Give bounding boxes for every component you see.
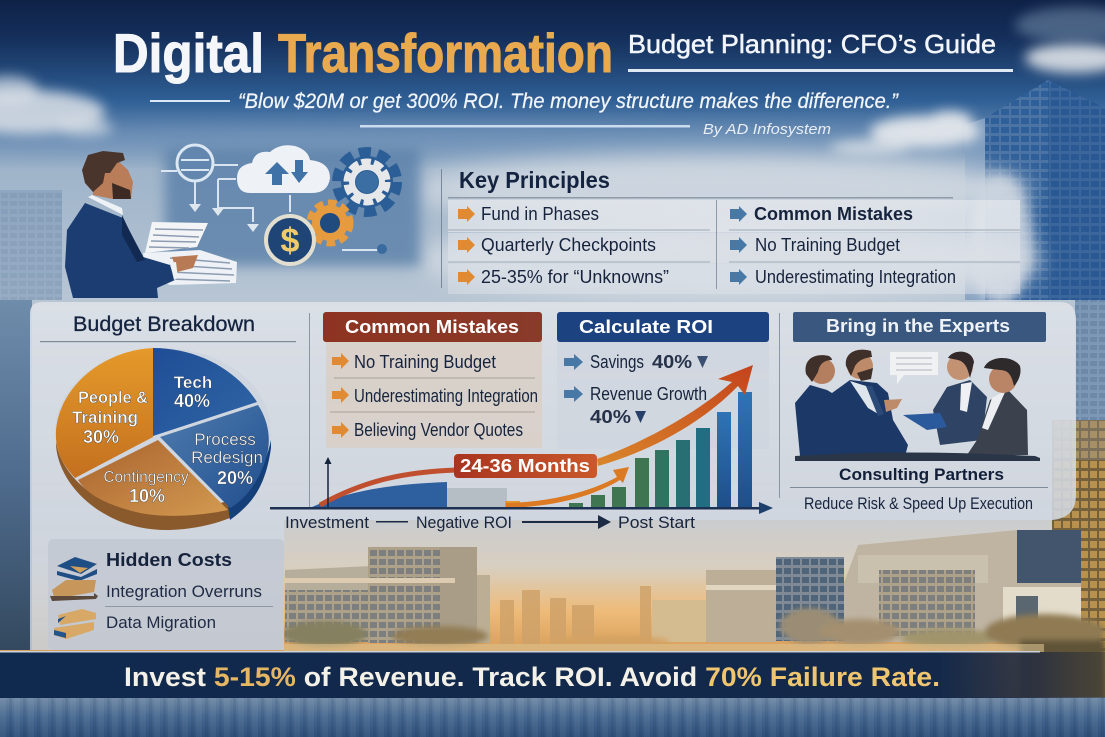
list: principles: 25-35% for “Unknowns” [481, 267, 669, 287]
panel: key principles [441, 167, 1020, 294]
icon: dollar coin: $ [281, 222, 300, 260]
timeline labels: Post Start [618, 513, 695, 532]
illustration: CFO holding documents [65, 151, 237, 298]
banner: bottom line: Invest 5-15% of Revenue. Track ROI. Avoid 70% Failure Rate. [124, 662, 940, 692]
panel: main content card [30, 302, 1076, 650]
pie chart: budget breakdown: 40% [174, 391, 210, 411]
heading: budget breakdown: Budget Breakdown [73, 313, 255, 336]
list: mistakes: Common Mistakes [754, 204, 913, 224]
illustration: consulting team [795, 350, 1040, 461]
collar and suit [65, 195, 198, 298]
list: mistakes [730, 204, 956, 287]
pie chart: budget breakdown: 20% [217, 468, 253, 488]
speech bubble [890, 352, 938, 384]
heading: common mistakes: Common Mistakes [345, 316, 519, 337]
byline: By AD Infosystem [703, 121, 831, 138]
slice: people and training [56, 348, 153, 478]
icon: books [50, 580, 98, 601]
panel: calculate ROI: 40% [652, 352, 692, 372]
heading: hidden costs: Hidden Costs [106, 550, 232, 570]
panel: common mistakes: Believing Vendor Quotes [354, 420, 523, 440]
icon: books [57, 557, 97, 581]
icon: dollar coin [266, 216, 314, 264]
badge: 24-36 months: 24-36 Months [460, 456, 590, 476]
slice: process redesign [160, 405, 269, 508]
badge: 24-36 months [454, 454, 597, 478]
panel: calculate ROI: Savings [590, 352, 644, 372]
pie chart: budget breakdown: 30% [83, 427, 119, 447]
arrow: axis [270, 457, 773, 514]
heading: key principles: Key Principles [459, 167, 610, 193]
list: mistakes: Underestimating Integration [755, 267, 956, 287]
pie chart: budget breakdown: Redesign [191, 448, 263, 467]
pie chart: budget breakdown: Contingency [104, 469, 189, 486]
panel: calculate ROI: Revenue Growth [590, 384, 707, 404]
timeline labels [285, 513, 695, 532]
caption: consulting partners: Consulting Partners [839, 465, 1004, 484]
title [113, 22, 613, 84]
panel: hidden costs: Integration Overruns [106, 583, 262, 601]
icon: orange gear [311, 204, 349, 242]
list: principles: Fund in Phases [481, 204, 599, 224]
timeline labels: Investment [285, 513, 369, 532]
icon: blue gear [337, 152, 397, 212]
pie chart: budget breakdown: 10% [129, 486, 165, 506]
title: Digital [113, 22, 264, 84]
skyline and office buildings at sunset [283, 530, 1105, 702]
heading: calculate ROI: Calculate ROI [579, 316, 713, 337]
list: principles: Quarterly Checkpoints [481, 235, 656, 255]
pie chart: budget breakdown [55, 348, 271, 530]
pie chart: budget breakdown: Process [194, 430, 256, 449]
heading: calculate ROI [557, 312, 769, 342]
subtitle: Budget Planning: CFO’s Guide [628, 29, 996, 59]
bars [569, 458, 649, 507]
head [82, 151, 133, 199]
icon: books [54, 609, 96, 639]
quote: “Blow $20M or get 300% ROI. The money structure makes the difference.” [238, 90, 899, 113]
water reflection [0, 697, 1105, 737]
heading: experts: Bring in the Experts [826, 315, 1010, 336]
panel: common mistakes [323, 312, 542, 448]
panel: calculate ROI: 40% [590, 407, 631, 427]
list: principles [458, 204, 669, 287]
caption: reduce risk: Reduce Risk & Speed Up Execution [804, 494, 1033, 513]
pie chart: budget breakdown: Training [72, 408, 138, 427]
chart: ROI growth over time [270, 365, 773, 532]
slice: tech [153, 348, 257, 436]
subtitle [628, 29, 1013, 72]
slice: contingency [78, 440, 228, 516]
faces [806, 350, 1021, 393]
panel: common mistakes: No Training Budget [354, 352, 496, 372]
panel: common mistakes: Underestimating Integration [354, 386, 538, 406]
illustration: digital finance icons [161, 145, 420, 266]
area: negative ROI investment [312, 482, 507, 507]
list: mistakes: No Training Budget [755, 235, 900, 255]
arrow: red ROI trend [597, 365, 753, 466]
panel: calculate ROI [557, 312, 769, 449]
arrow: orange growth [506, 467, 629, 508]
papers [143, 222, 237, 285]
pie chart: budget breakdown: Tech [174, 373, 212, 392]
icon: cloud [237, 145, 330, 193]
title: Transformation [278, 22, 613, 84]
panel: hidden costs [48, 539, 284, 650]
tablet [903, 413, 947, 430]
icon: data circle [161, 145, 213, 181]
heading: experts [793, 312, 1046, 342]
heading: common mistakes [323, 312, 542, 342]
panel: bring in the experts [790, 312, 1048, 513]
panel: hidden costs: Data Migration [106, 614, 216, 632]
banner: bottom line [0, 651, 1105, 698]
timeline labels: Negative ROI [416, 513, 512, 532]
pie chart: budget breakdown: People & [78, 388, 148, 407]
